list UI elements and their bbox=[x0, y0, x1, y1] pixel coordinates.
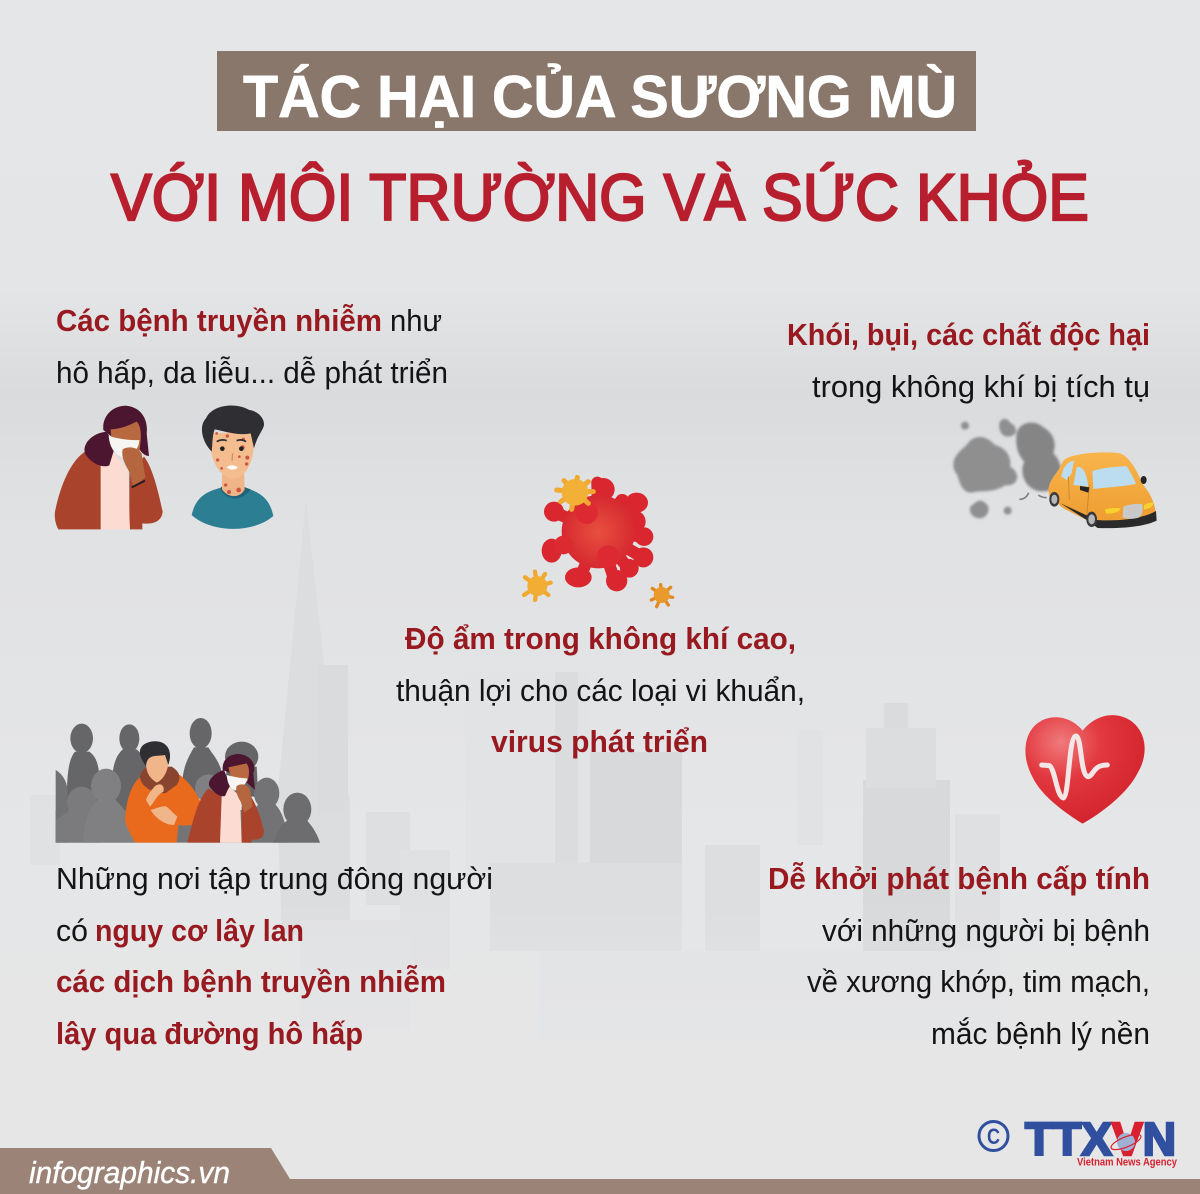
text block: crowded places: có bbox=[56, 913, 88, 948]
text block: infectious diseases bbox=[56, 303, 448, 390]
logo: TTXVN: C bbox=[987, 1124, 1000, 1149]
icon: man with rash bbox=[192, 405, 273, 529]
icon: virus cluster bbox=[524, 477, 673, 607]
footer band bbox=[0, 1148, 1200, 1194]
text block: infectious diseases: như bbox=[390, 303, 442, 338]
text block: humidity: virus phát triển bbox=[491, 724, 708, 759]
text block: acute illness: về xương khớp, tim mạch, bbox=[807, 964, 1150, 999]
text block: acute illness: mắc bệnh lý nền bbox=[931, 1016, 1150, 1051]
text block: humidity: thuận lợi cho các loại vi khuẩn, bbox=[396, 673, 805, 708]
foggy city skyline bbox=[0, 500, 1200, 1100]
text block: humidity: Độ ẩm trong không khí cao, bbox=[405, 621, 796, 656]
text block: crowded places: nguy cơ lây lan bbox=[95, 913, 304, 948]
text block: crowded places bbox=[56, 861, 493, 1051]
text block: crowded places: Những nơi tập trung đông người bbox=[56, 861, 493, 896]
text block: infectious diseases: hô hấp, da liễu... dễ phát triển bbox=[56, 355, 448, 390]
logo: TTXVN: TTXVN bbox=[1025, 1113, 1176, 1165]
text block: humidity bbox=[396, 621, 805, 759]
text block: smoke and dust: Khói, bụi, các chất độc hại bbox=[787, 317, 1150, 352]
text block: crowded places: các dịch bệnh truyền nhiễm bbox=[56, 964, 446, 999]
icon: crowd with sick people bbox=[56, 718, 320, 843]
text block: acute illness bbox=[768, 861, 1150, 1051]
text block: smoke and dust: trong không khí bị tích tụ bbox=[812, 369, 1150, 404]
text block: acute illness: Dễ khởi phát bệnh cấp tính bbox=[768, 861, 1150, 896]
icon: coughing woman with mask bbox=[55, 406, 163, 529]
logo: TTXVN: Vietnam News Agency bbox=[1077, 1156, 1178, 1168]
subtitle: VỚI MÔI TRƯỜNG VÀ SỨC KHỎE bbox=[111, 160, 1089, 234]
title banner: TÁC HẠI CỦA SƯƠNG MÙ bbox=[243, 63, 957, 130]
icon: heart with ECG line bbox=[1025, 715, 1145, 824]
text block: crowded places: lây qua đường hô hấp bbox=[56, 1016, 363, 1051]
text block: acute illness: với những người bị bệnh bbox=[822, 913, 1150, 948]
text block: smoke and dust bbox=[787, 317, 1150, 404]
icon: car with exhaust smoke bbox=[953, 419, 1157, 528]
website label: infographics.vn bbox=[29, 1155, 230, 1190]
text block: infectious diseases: Các bệnh truyền nhiễm bbox=[56, 303, 382, 338]
